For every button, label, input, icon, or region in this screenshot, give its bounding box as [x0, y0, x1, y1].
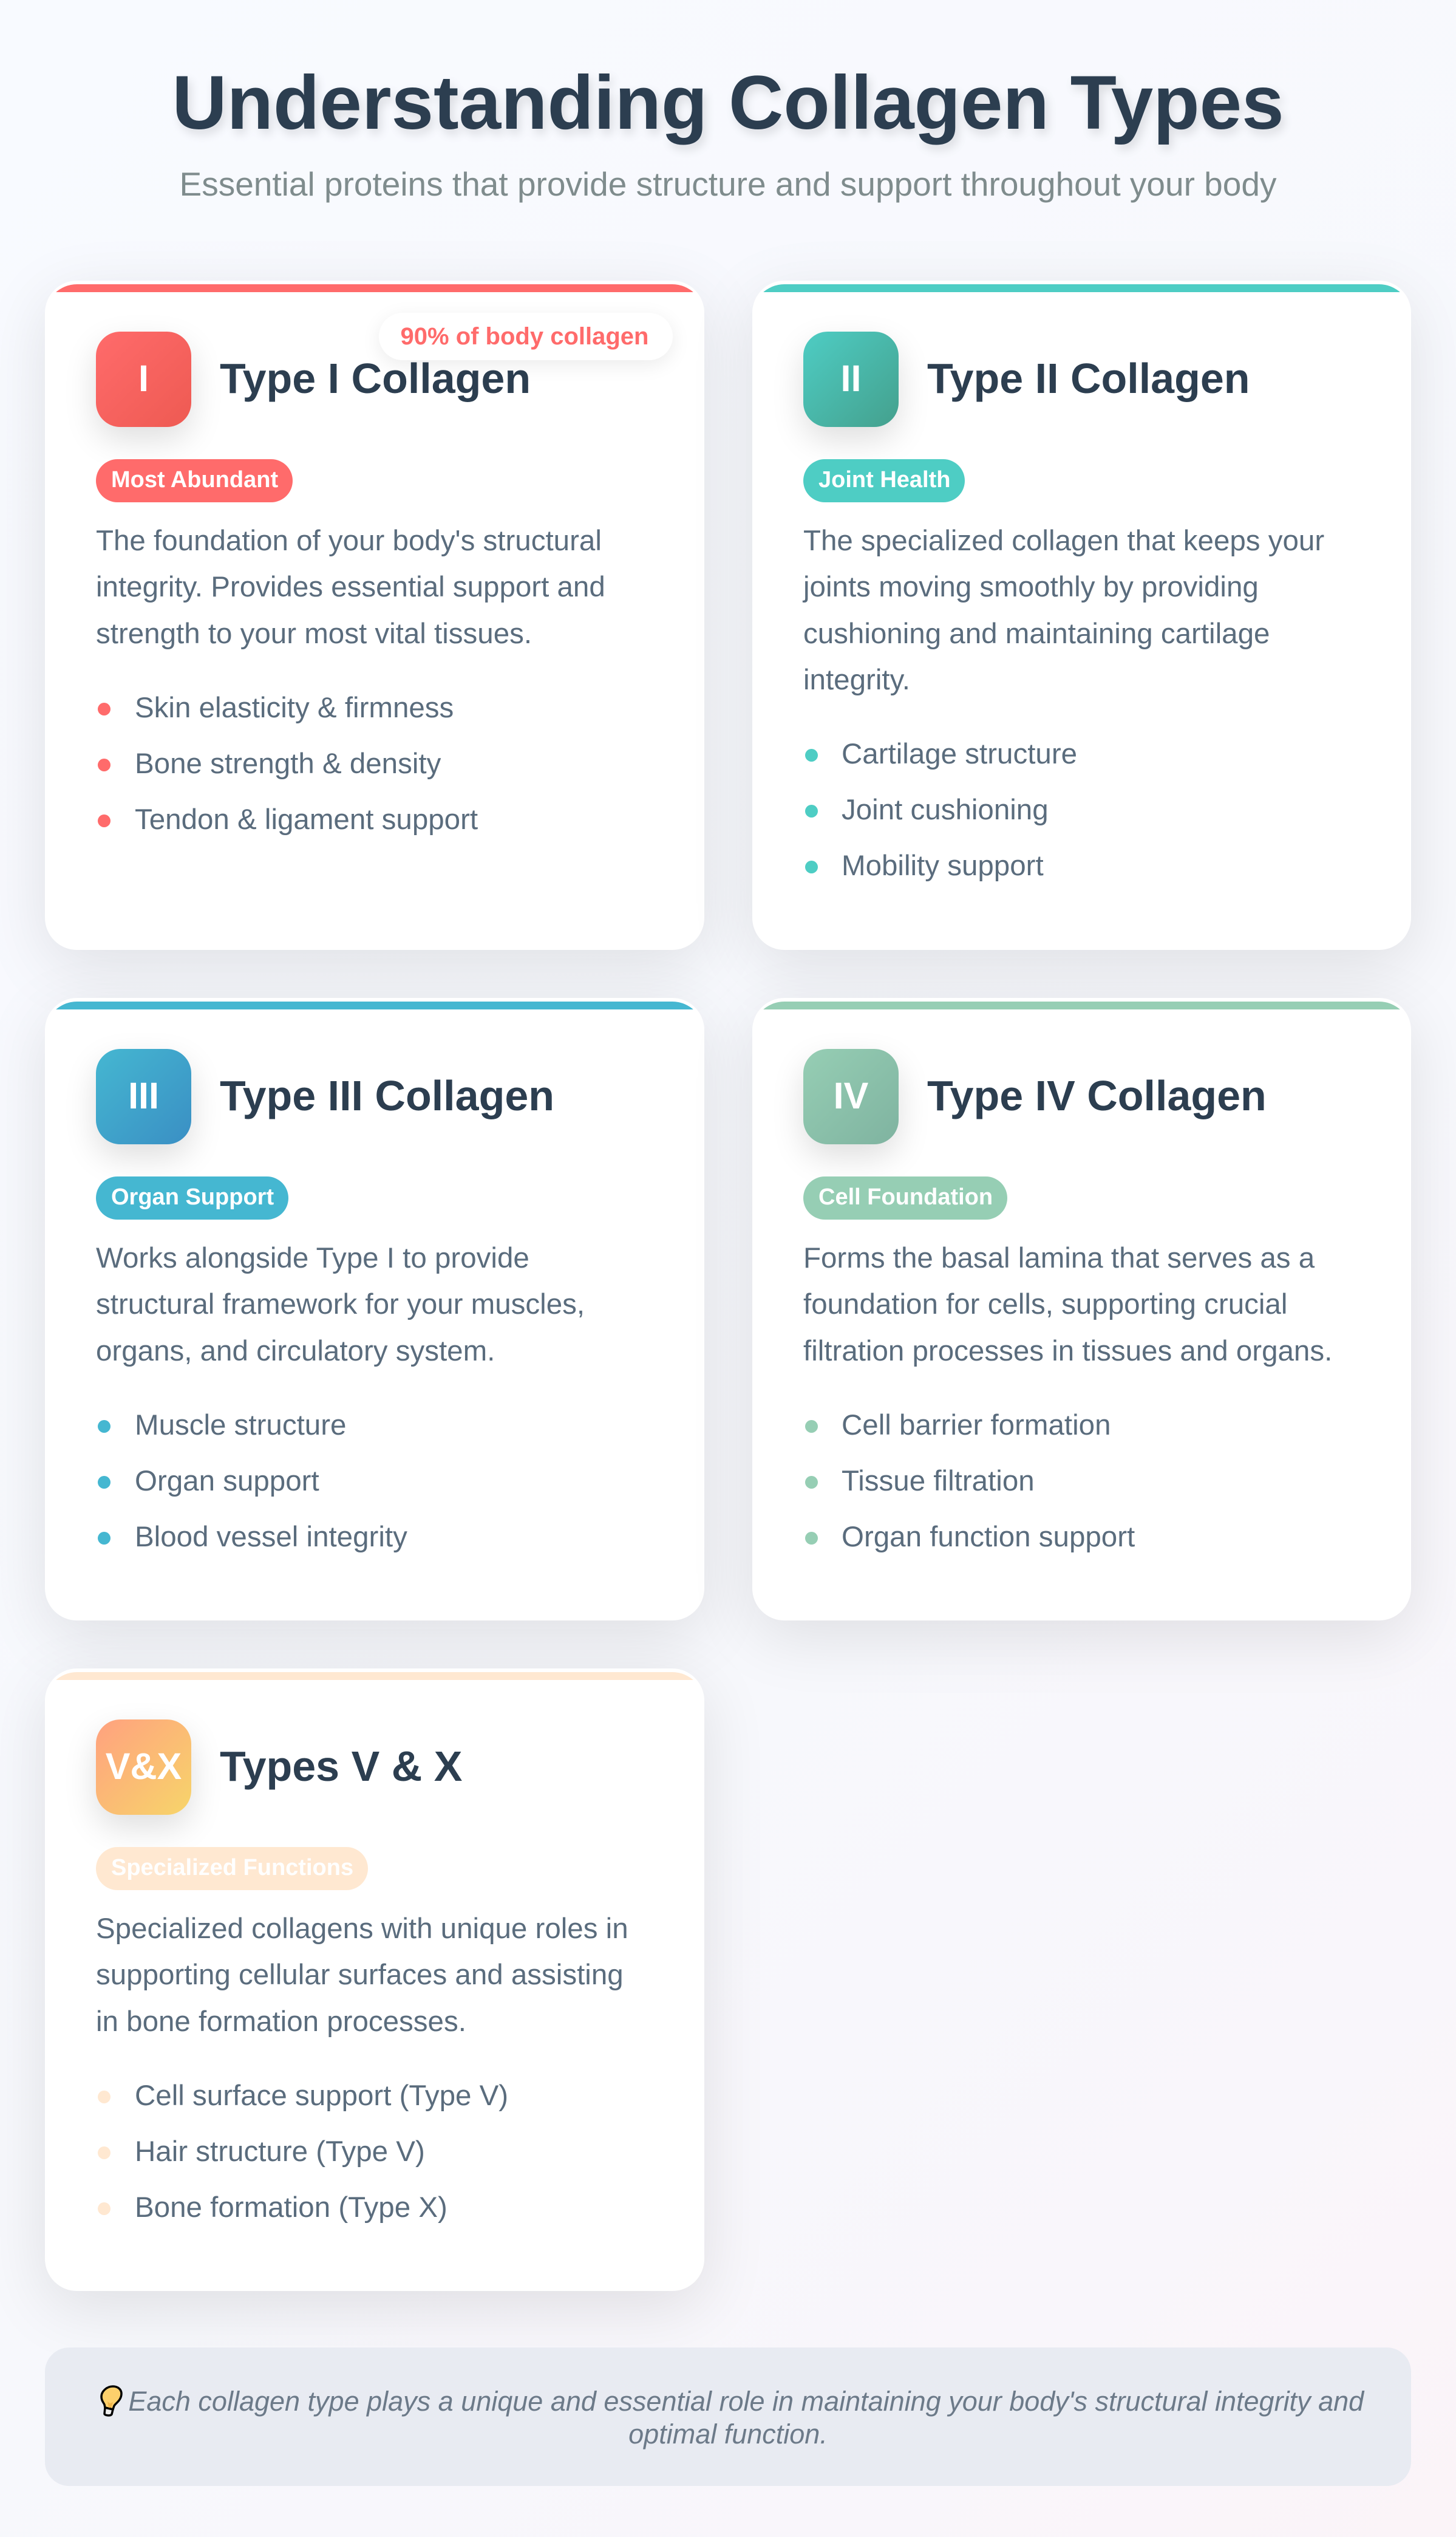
description: Type II: The specialized collagen that keeps your: [803, 525, 1324, 557]
icon: Type IV numeral: [803, 1049, 899, 1144]
description: Type IV: [803, 1242, 1332, 1367]
description: Types V & X: in bone formation processes.: [96, 2006, 466, 2038]
tag: Most Abundant: [96, 459, 293, 502]
description: Type I: The foundation of your body's structural: [96, 525, 602, 557]
description: Type II: cushioning and maintaining cartilage: [803, 618, 1270, 650]
tag: Organ Support: Organ Support: [111, 1184, 274, 1210]
description: Type I: strength to your most vital tissues.: [96, 618, 532, 650]
description: Type IV: foundation for cells, supporting crucial: [803, 1288, 1287, 1320]
icon: V&X label: V&X: [106, 1746, 182, 1787]
green top bar: [763, 1002, 1400, 1009]
tag: Specialized Functions: [96, 1847, 368, 1890]
description: Type II: [803, 525, 1324, 696]
footer text: optimal function.: [628, 2419, 828, 2450]
benefits list: Type I: Skin elasticity & firmness: [135, 692, 454, 724]
heading: Type IV: Type IV Collagen: [927, 1072, 1267, 1119]
benefits list: Type IV: Cell barrier formation: [842, 1409, 1111, 1441]
description: Type III: structural framework for your muscles,: [96, 1288, 585, 1320]
benefits list: Types V & X: Hair structure (Type V): [135, 2136, 425, 2168]
icon: light bulb: [100, 2385, 123, 2417]
description: Type IV: filtration processes in tissues and organs.: [803, 1335, 1332, 1367]
description: Type III: [96, 1242, 585, 1367]
benefits list: Type III: Muscle structure: [135, 1409, 346, 1441]
benefits list: Type IV: Organ function support: [842, 1521, 1135, 1553]
tag: Specialized Functions: Specialized Functions: [111, 1855, 353, 1880]
benefits list: Type IV: [805, 1409, 1135, 1553]
tag: Organ Support: [96, 1176, 288, 1220]
panel: Types V & X: [45, 1668, 704, 2291]
tag: Joint Health: [803, 459, 965, 502]
description: Type III: Works alongside Type I to provide: [96, 1242, 529, 1274]
icon: Type I numeral: I: [138, 358, 149, 399]
benefits list: Type II: [805, 738, 1077, 882]
benefits list: Type IV: Tissue filtration: [842, 1465, 1035, 1497]
panel: Type II Collagen: [752, 281, 1411, 950]
badge: 90% of body collagen: 90% of body collagen: [401, 323, 648, 350]
benefits list: Type I: [98, 692, 478, 836]
tag: Cell Foundation: Cell Foundation: [818, 1184, 993, 1210]
description: Type I: integrity. Provides essential support and: [96, 571, 605, 603]
footer callout: [45, 2347, 1411, 2486]
benefits list: Type I: Tendon & ligament support: [135, 804, 478, 836]
benefits list: Type III: Blood vessel integrity: [135, 1521, 407, 1553]
benefits list: Type II: Joint cushioning: [842, 794, 1049, 826]
tag: Cell Foundation: [803, 1176, 1007, 1220]
icon: Type III numeral: III: [128, 1075, 159, 1116]
red top bar: [56, 284, 693, 292]
panel: Type I Collagen: [45, 281, 704, 950]
benefits list: Type I: Bone strength & density: [135, 748, 441, 780]
icon: Type II numeral: II: [841, 358, 861, 399]
heading: Types V & X: Types V & X: [220, 1743, 462, 1790]
description: Type I: [96, 525, 605, 650]
benefits list: Type II: Cartilage structure: [842, 738, 1077, 770]
peach top bar: [56, 1672, 693, 1680]
description: Type IV: Forms the basal lamina that serves as a: [803, 1242, 1315, 1274]
tag: Joint Health: Joint Health: [818, 467, 950, 493]
benefits list: Type II: Mobility support: [842, 850, 1044, 882]
benefits list: Types V & X: Cell surface support (Type V): [135, 2080, 508, 2112]
panel: Type IV Collagen: [752, 998, 1411, 1620]
title: Understanding Collagen Types: [172, 61, 1284, 145]
panel: Type III Collagen: [45, 998, 704, 1620]
benefits list: Types V & X: Bone formation (Type X): [135, 2191, 447, 2224]
footer text: Each collagen type plays a unique and essential role in maintaining your body's structural integrity and: [128, 2386, 1364, 2417]
icon: Type III numeral: [96, 1049, 191, 1144]
tag: Most Abundant: Most Abundant: [111, 467, 278, 493]
icon: Type II numeral: [803, 332, 899, 427]
footer text: [128, 2386, 1365, 2450]
benefits list: Type III: Organ support: [135, 1465, 319, 1497]
description: Types V & X: supporting cellular surfaces and assisting: [96, 1959, 624, 1991]
heading: Type II: Type II Collagen: [927, 355, 1250, 402]
heading: Type III: Type III Collagen: [220, 1072, 554, 1119]
description: Types V & X: Specialized collagens with unique roles in: [96, 1913, 628, 1945]
description: Type II: joints moving smoothly by providing: [803, 571, 1259, 603]
icon: Type I numeral: [96, 332, 191, 427]
icon: Type IV numeral: IV: [834, 1075, 868, 1116]
subtitle: Essential proteins that provide structure and support throughout your body: [180, 165, 1276, 203]
description: Type II: integrity.: [803, 664, 910, 696]
benefits list: Type III: [98, 1409, 407, 1553]
badge background: 90% of body collagen: [379, 313, 673, 360]
description: Type III: organs, and circulatory system.: [96, 1335, 495, 1367]
blue top bar: [56, 1002, 693, 1009]
icon: V&X label: [96, 1719, 191, 1815]
teal top bar: [763, 284, 1400, 292]
description: Types V & X: [96, 1913, 628, 2038]
benefits list: Types V & X: [98, 2080, 508, 2224]
heading: Type I: Type I Collagen: [220, 355, 531, 402]
